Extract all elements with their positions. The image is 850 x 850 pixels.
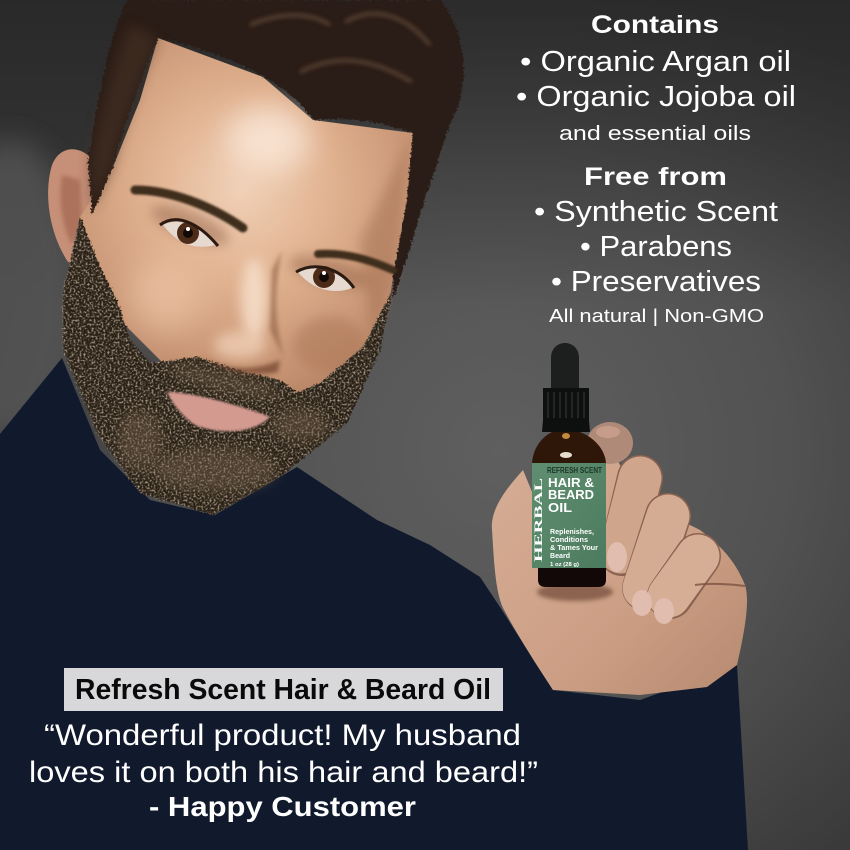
text block: free from: • Preservatives <box>551 266 761 298</box>
customer testimonial: “Wonderful product! My husband <box>44 719 521 752</box>
customer testimonial: - Happy Customer <box>149 791 416 822</box>
beard <box>63 217 392 515</box>
ribbed cap <box>542 388 590 432</box>
label text: HAIR & <box>548 475 594 490</box>
text block: contains: Contains <box>591 11 719 39</box>
label text <box>531 466 602 568</box>
text block: free from <box>534 163 778 326</box>
cap ribs <box>548 392 584 418</box>
amber glass shoulder <box>532 432 606 463</box>
finger 1 <box>621 478 640 553</box>
glass reflection <box>562 433 570 439</box>
finger 2 <box>644 516 668 588</box>
left eye <box>160 220 218 247</box>
glass highlight <box>560 452 572 458</box>
text block: contains <box>516 11 796 145</box>
eyebrows <box>135 190 393 270</box>
label text: OIL <box>548 500 572 515</box>
text block: free from: All natural | Non-GMO <box>549 306 764 326</box>
dropper bulb <box>551 343 579 388</box>
hair <box>88 0 464 300</box>
eye socket shading <box>146 196 374 295</box>
left cheek highlight <box>129 259 201 331</box>
bottle base <box>538 568 606 587</box>
hair highlights <box>250 14 430 82</box>
label text: 1 oz (28 g) <box>550 562 579 568</box>
label text: BEARD <box>548 487 594 502</box>
fingernails <box>596 426 674 624</box>
customer testimonial <box>29 719 538 822</box>
text block: free from: • Synthetic Scent <box>534 196 778 228</box>
sweater <box>0 358 748 850</box>
palm crease <box>695 584 745 586</box>
forehead highlight <box>226 106 310 174</box>
temple shade <box>360 133 413 345</box>
customer testimonial: loves it on both his hair and beard!” <box>29 756 538 789</box>
label text: HERBAL <box>531 478 545 562</box>
text block: contains: • Organic Jojoba oil <box>516 81 796 113</box>
label text: & Tames Your <box>550 545 598 552</box>
right eye <box>296 266 354 291</box>
hand holding bottle <box>492 422 747 695</box>
text block: contains: • Organic Argan oil <box>520 46 791 78</box>
label text: REFRESH SCENT <box>547 466 602 475</box>
label text: Conditions <box>550 537 588 544</box>
curled top finger <box>587 422 633 464</box>
temple fade <box>90 25 158 210</box>
product name banner: Refresh Scent Hair & Beard Oil <box>75 674 491 706</box>
nose <box>197 250 284 374</box>
finger 3 <box>669 556 698 596</box>
lips <box>167 392 270 431</box>
product bottle <box>531 343 606 587</box>
inner ear shadow <box>60 175 82 245</box>
palm shadow under bottle <box>537 583 613 601</box>
palm and thumb <box>492 430 747 695</box>
label text: Replenishes, <box>550 529 594 536</box>
face <box>80 38 413 400</box>
beard lighter tones <box>118 359 328 492</box>
text block: free from: • Parabens <box>580 231 732 263</box>
text block: free from: Free from <box>584 163 727 191</box>
lower cheek shade <box>294 317 366 373</box>
green label <box>532 463 606 568</box>
label text: Beard <box>550 553 570 560</box>
ear <box>48 149 93 268</box>
text block: contains: and essential oils <box>559 123 751 145</box>
